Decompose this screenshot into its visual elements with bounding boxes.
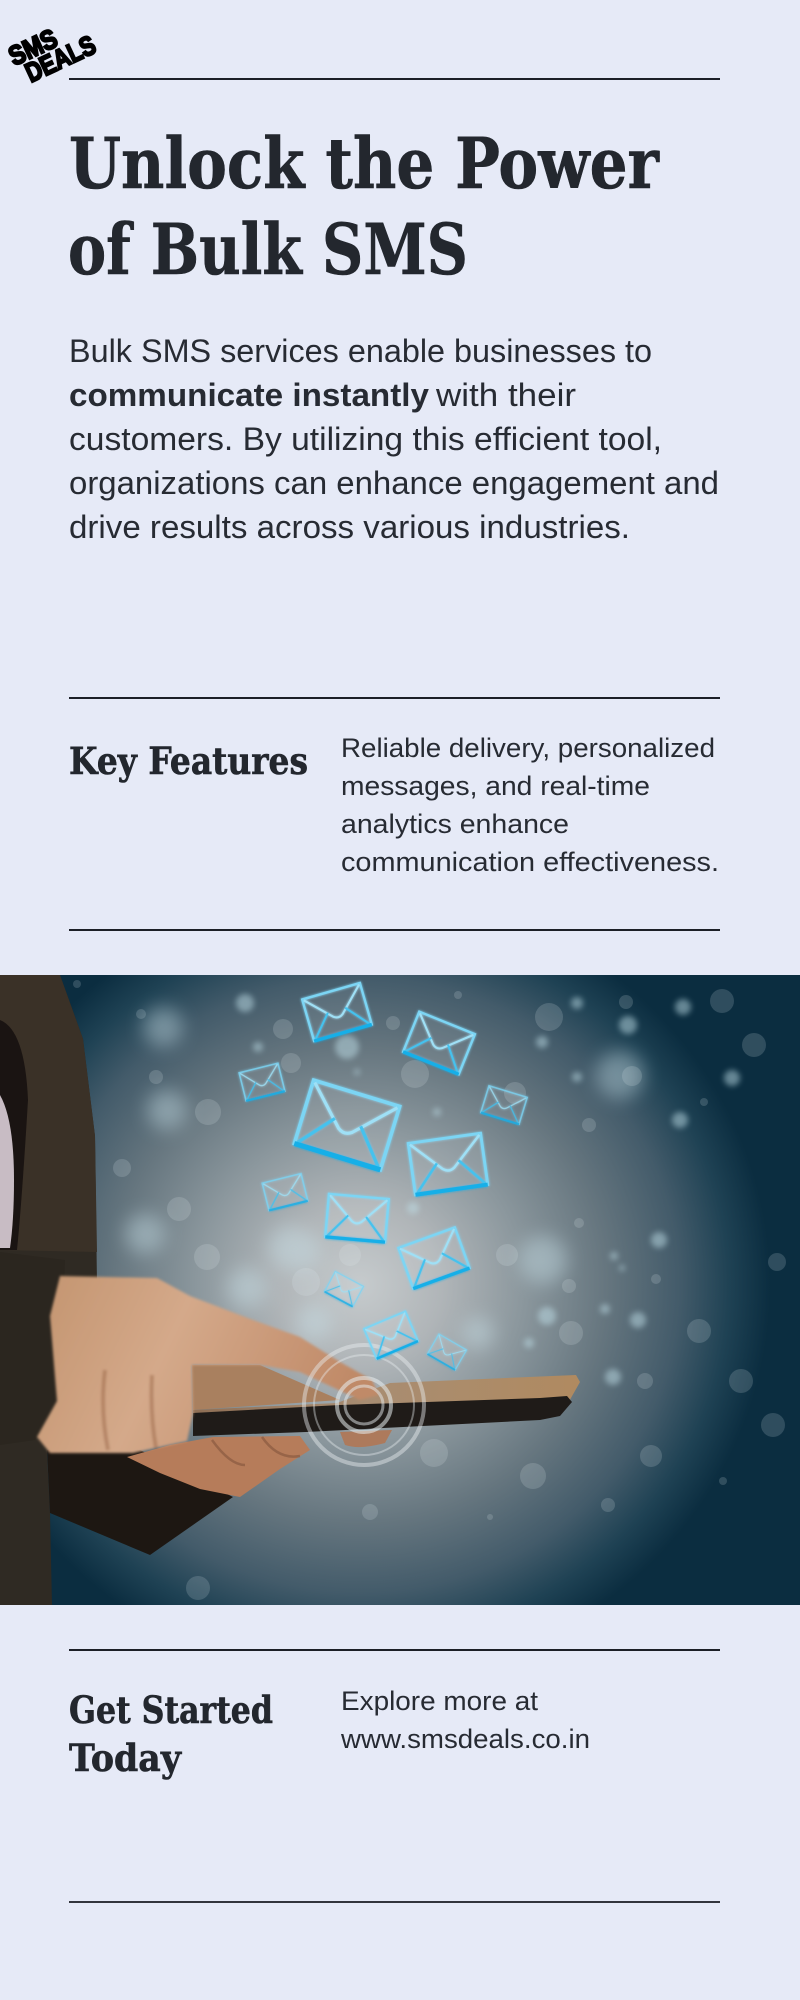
intro paragraph: Bulk SMS services enable businesses to [69, 333, 652, 369]
logo: SMS Deals: DEALS [21, 30, 100, 88]
section rule: bottom [69, 1901, 720, 1903]
tap rings [304, 1345, 424, 1465]
lower fingers [127, 1430, 392, 1497]
get started text [340, 1686, 590, 1754]
heading: Get Started Today: Get Started [69, 1688, 273, 1732]
title: Unlock the Power [69, 122, 660, 205]
main hand [37, 1276, 379, 1453]
intro paragraph: drive results across various industries. [69, 509, 630, 545]
bokeh discs [73, 980, 786, 1600]
key features text: communication effectiveness. [341, 847, 719, 877]
envelopes [239, 983, 527, 1370]
title [68, 122, 660, 291]
jacket sleeve [0, 975, 97, 1605]
key features text: messages, and real-time [341, 771, 650, 801]
intro paragraph: communicate instantly [69, 377, 429, 413]
intro paragraph: customers. By utilizing this efficient tool, [69, 421, 662, 457]
soft bokeh lights, small [236, 994, 740, 1385]
heading: Get Started Today [69, 1688, 273, 1780]
section rule: key features top [69, 697, 720, 699]
logo: SMS Deals [4, 10, 100, 92]
get started text: www.smsdeals.co.in [340, 1724, 590, 1754]
photo: hand tapping phone with floating envelopes [0, 975, 800, 1605]
intro paragraph [69, 333, 719, 545]
phone top surface [193, 1375, 580, 1416]
section rule: get started top [69, 1649, 720, 1651]
thumb above phone [192, 1365, 340, 1410]
intro paragraph: organizations can enhance engagement and [69, 465, 719, 501]
get started text: Explore more at [341, 1686, 539, 1716]
key features text [341, 733, 719, 877]
logo: SMS Deals: SMS [4, 23, 62, 72]
heading: Key Features: Key Features [69, 739, 308, 783]
title: of Bulk SMS [68, 208, 468, 291]
soft bokeh lights, large [125, 1007, 644, 1349]
top rule [69, 78, 720, 80]
key features text: analytics enhance [341, 809, 569, 839]
key features text: Reliable delivery, personalized [341, 733, 715, 763]
intro paragraph: with their [435, 377, 576, 413]
heading: Get Started Today: Today [69, 1736, 182, 1780]
phone body [193, 1396, 572, 1436]
lower arm [47, 1450, 233, 1555]
section rule: key features bottom [69, 929, 720, 931]
